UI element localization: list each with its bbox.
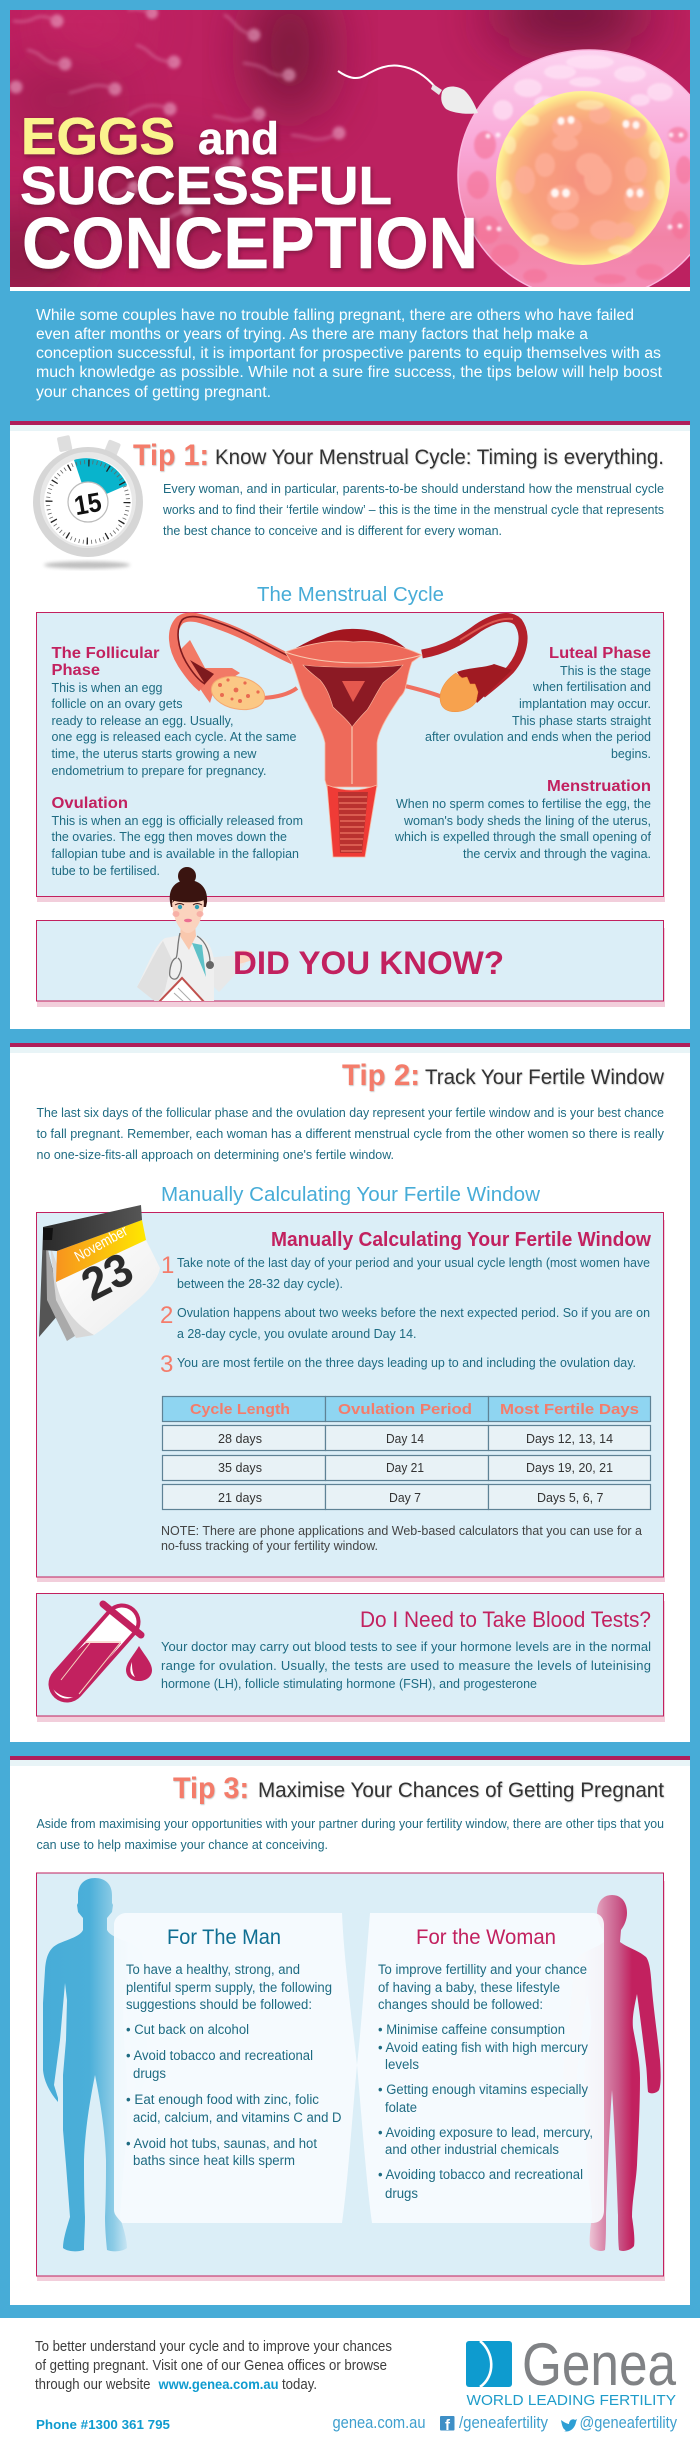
icon: calendar: November — [72, 1223, 131, 1265]
card: for the woman: • Avoiding exposure to lead, mercury, — [378, 2125, 593, 2140]
tip 1 body text: the best chance to conceive and is different for every woman. — [163, 523, 502, 538]
illustration: uterus — [173, 617, 523, 857]
text: the follicular phase: Phase — [52, 662, 100, 679]
vagina — [327, 785, 377, 857]
tip 2 body text: The last six days of the follicular phase and the ovulation day represent your fertile window and is your best chance — [36, 1105, 664, 1120]
panel: tip 2 — [10, 1043, 690, 1742]
card: for the man: acid, calcium, and vitamins C and D — [133, 2110, 342, 2125]
card: for the woman — [357, 1913, 604, 2223]
table — [162, 1396, 650, 1510]
card: for the man: • Eat enough food with zinc, folic — [126, 2092, 319, 2107]
card: for the woman: • Getting enough vitamins especially — [378, 2082, 588, 2097]
card: for the woman: folate — [385, 2100, 417, 2115]
table header: Ovulation Period — [338, 1401, 472, 1418]
card: for the woman: levels — [385, 2057, 419, 2072]
tip 2 body text: no one-size-fits-all approach on determining one's fertile window. — [36, 1147, 394, 1162]
table row 3: Days 5, 6, 7 — [537, 1490, 604, 1505]
card: for the woman: • Minimise caffeine consumption — [378, 2022, 565, 2037]
social links: genea.com.au — [332, 2414, 426, 2432]
step 1: 1 — [161, 1252, 174, 1279]
blood test title: Do I Need to Take Blood Tests? — [360, 1607, 651, 1632]
icon: facebook — [440, 2416, 454, 2434]
step 1 — [161, 1252, 650, 1291]
uterus body — [285, 641, 422, 787]
text: menstruation: the cervix and through the vagina. — [463, 847, 651, 861]
table row 1: 28 days — [218, 1431, 262, 1446]
card: for the man: • Cut back on alcohol — [126, 2022, 249, 2037]
social links: @geneafertility — [580, 2414, 678, 2432]
heading: tip 1 — [133, 439, 664, 472]
title: and — [198, 113, 279, 164]
footer call to action: today. — [282, 2377, 317, 2393]
footer call to action: of getting pregnant. Visit one of our Genea offices or browse — [35, 2358, 387, 2374]
table row 2 — [162, 1456, 650, 1480]
text: the follicular phase: The Follicular — [52, 645, 160, 662]
card: for the woman: To improve fertillity and your chance — [378, 1962, 587, 1977]
card: for the man: • Avoid hot tubs, saunas, and hot — [126, 2136, 317, 2151]
text: luteal phase: begins. — [611, 747, 651, 761]
heading: tip 1: Know Your Menstrual Cycle: Timing is everything. — [215, 446, 664, 469]
icon: calendar: 23 — [73, 1242, 141, 1311]
heading: tip 3: Maximise Your Chances of Getting Pregnant — [258, 1779, 664, 1802]
illustration: doctor — [137, 925, 252, 1003]
card: for the man: baths since heat kills sperm — [133, 2153, 295, 2168]
note — [161, 1523, 643, 1553]
title: EGGS — [21, 108, 175, 166]
right tube — [422, 617, 523, 694]
egg yolk — [496, 91, 670, 265]
left tube — [180, 640, 240, 703]
icon: twitter — [561, 2419, 577, 2431]
social links: /geneafertility — [459, 2414, 549, 2432]
text: luteal phase: This phase starts straight — [512, 714, 652, 728]
card: for the man: suggestions should be followed: — [126, 1997, 312, 2012]
intro paragraph: While some couples have no trouble falling pregnant, there are others who have failed — [36, 307, 634, 324]
card: for the man: • Avoid tobacco and recreational — [126, 2048, 313, 2063]
note: NOTE: There are phone applications and Web-based calculators that you can use for a — [161, 1523, 643, 1538]
text: menstruation: which is expelled through the small opening of — [394, 830, 652, 844]
table header: Cycle Length — [190, 1401, 290, 1418]
silhouette: woman — [563, 1895, 661, 2251]
ligaments — [262, 688, 297, 698]
hero banner — [10, 10, 690, 291]
intro paragraph: your chances of getting pregnant. — [36, 384, 271, 401]
logo: genea — [466, 2331, 677, 2409]
heading: manually calculating: Manually Calculating Your Fertile Window — [161, 1184, 541, 1206]
card: for the woman: • Avoid eating fish with high mercury — [378, 2040, 588, 2055]
tip 1 body text: works and to find their ‘fertile window’ – this is the time in the menstrual cycle that represents — [162, 502, 664, 517]
social links — [332, 2414, 678, 2434]
heading: for the woman: For the Woman — [416, 1926, 556, 1949]
table row 1 — [162, 1426, 650, 1450]
text: menstruation — [394, 778, 652, 861]
phone number: Phone #1300 361 795 — [36, 2417, 170, 2432]
icon: stopwatch — [33, 435, 143, 568]
calculation title: Manually Calculating Your Fertile Window — [271, 1229, 651, 1251]
step 2: Ovulation happens about two weeks before the next expected period. So if you are on — [177, 1305, 650, 1320]
text: the follicular phase: This is when an egg — [52, 681, 163, 695]
blood test text: Your doctor may carry out blood tests to see if your hormone levels are in the normal — [161, 1639, 651, 1654]
card: for the man: To have a healthy, strong, and — [126, 1962, 300, 1977]
table row 1: Day 14 — [386, 1431, 424, 1446]
card: for the woman: changes should be followed: — [378, 1997, 543, 2012]
note: no-fuss tracking of your fertility window. — [161, 1538, 378, 1553]
background sperm (blurred) — [10, 7, 346, 222]
text: the follicular phase: time, the uterus starts growing a new — [52, 747, 257, 761]
step 2 — [160, 1302, 650, 1341]
heading: tip 3 — [173, 1772, 664, 1805]
uterus cavity — [303, 665, 403, 727]
intro paragraph: even after months or years of trying. As there are many factors that help make a — [36, 326, 588, 343]
text: luteal phase: Luteal Phase — [549, 645, 651, 662]
step 1: Take note of the last day of your period and your usual cycle length (most women have — [177, 1255, 650, 1270]
text: menstruation: woman's body sheds the lining of the uterus, — [403, 814, 651, 828]
card: for the man: drugs — [133, 2066, 166, 2081]
icon: stopwatch: 15 — [72, 487, 104, 521]
table header: Most Fertile Days — [500, 1401, 639, 1418]
footer call to action: through our website — [35, 2377, 150, 2393]
intro paragraph: much knowledge as possible. While not a sure fire success, the tips below will help boost — [36, 364, 663, 381]
panel: blood tests — [36, 1594, 665, 1722]
table row 2: Days 19, 20, 21 — [526, 1460, 613, 1475]
blood test text — [161, 1639, 651, 1691]
text: luteal phase: This is the stage — [560, 664, 651, 678]
blood test text: range for ovulation. Usually, the tests are used to measure the levels of luteinising — [161, 1658, 651, 1673]
heading: tip 3: Tip 3: — [173, 1772, 249, 1805]
text: ovulation: tube to be fertilised. — [52, 864, 160, 878]
doctor head — [170, 867, 207, 933]
card: for the woman: • Avoiding tobacco and recreational — [378, 2167, 583, 2182]
step 2: 2 — [160, 1302, 173, 1329]
text: luteal phase: after ovulation and ends when the period — [425, 730, 651, 744]
table row 3 — [162, 1484, 650, 1510]
text: the follicular phase — [52, 645, 297, 778]
step 2: a 28-day cycle, you ovulate around Day 14. — [177, 1326, 416, 1341]
heading: the menstrual cycle: The Menstrual Cycle — [257, 584, 444, 606]
title — [20, 108, 478, 284]
footer call to action: To better understand your cycle and to improve your chances — [35, 2339, 392, 2355]
tip 1 body text: Every woman, and in particular, parents-to-be should understand how the menstrual cycle — [163, 481, 664, 496]
table row 2: 35 days — [218, 1460, 262, 1475]
tip 3 body text — [36, 1816, 664, 1852]
footer — [0, 2318, 700, 2449]
step 3: 3 — [160, 1351, 173, 1378]
icon: facebook: f — [445, 2417, 451, 2434]
panel: tip 1 — [10, 421, 690, 1029]
text: ovulation — [52, 795, 303, 878]
text: menstruation: When no sperm comes to fertilise the egg, the — [396, 797, 651, 811]
logo: genea: WORLD LEADING FERTILITY — [466, 2392, 676, 2409]
text: luteal phase: when fertilisation and — [532, 680, 651, 694]
heading: tip 2: Track Your Fertile Window — [425, 1066, 665, 1089]
heading: tip 1: Tip 1: — [133, 439, 209, 472]
text: ovulation: the ovaries. The egg then moves down the — [52, 830, 287, 844]
blood test text: hormone (LH), follicle stimulating hormone (FSH), and progesterone — [161, 1676, 537, 1691]
text: ovulation: This is when an egg is officially released from — [52, 814, 303, 828]
text: the follicular phase: follicle on an ovary gets — [52, 697, 182, 711]
step 3 — [160, 1351, 636, 1378]
text: luteal phase: implantation may occur. — [519, 697, 651, 711]
panel: did you know — [36, 867, 665, 1007]
did you know text: DID YOU KNOW? — [233, 945, 504, 981]
title: SUCCESSFUL — [20, 156, 392, 216]
panel: man and woman — [36, 1873, 665, 2281]
card: for the woman: and other industrial chemicals — [385, 2142, 559, 2157]
neck — [180, 928, 196, 950]
footer call to action — [35, 2339, 392, 2393]
table row 2: Day 21 — [386, 1460, 424, 1475]
left ovary — [208, 672, 268, 714]
text: luteal phase — [425, 645, 652, 761]
text: the follicular phase: endometrium to prepare for pregnancy. — [52, 764, 266, 778]
text: ovulation: Ovulation — [52, 795, 128, 812]
card: for the man: plentiful sperm supply, the following — [126, 1980, 332, 1995]
arm and coat — [214, 956, 246, 992]
tip 2 body text — [36, 1105, 664, 1162]
text: ovulation: fallopian tube and is available in the fallopian — [52, 847, 299, 861]
footer call to action: www.genea.com.au — [158, 2376, 278, 2392]
clipboard — [158, 978, 205, 1003]
tip 3 body text: can use to help maximise your chance at conceiving. — [36, 1837, 328, 1852]
egg outer membrane — [458, 50, 700, 300]
icon: test tube and drop — [50, 1604, 152, 1697]
text: the follicular phase: ready to release an egg. Usually, — [52, 714, 233, 728]
tip 2 body text: to fall pregnant. Remember, each woman has a different menstrual cycle from the other women so there is really — [36, 1126, 664, 1141]
right ovary — [440, 673, 478, 712]
panel: menstrual cycle — [36, 612, 665, 902]
stethoscope — [170, 933, 210, 979]
silhouette: man — [43, 1878, 147, 2251]
logo: genea: Genea — [522, 2331, 677, 2398]
table row 1: Days 12, 13, 14 — [526, 1431, 613, 1446]
table row 3: 21 days — [218, 1490, 262, 1505]
heading: for the man: For The Man — [167, 1926, 281, 1949]
text: menstruation: Menstruation — [547, 778, 651, 795]
text: the follicular phase: one egg is released each cycle. At the same — [52, 730, 297, 744]
table header — [162, 1396, 650, 1422]
table row 3: Day 7 — [389, 1490, 421, 1505]
uterus dome — [296, 629, 410, 652]
panel: tip 3 — [10, 1756, 690, 2305]
card: for the woman: drugs — [385, 2186, 418, 2201]
intro paragraph: conception successful, it is important for prospective parents to equip themselves with as — [36, 345, 661, 362]
panel: manual calculation — [36, 1205, 665, 1582]
heading: tip 2: Tip 2: — [342, 1059, 420, 1092]
card: for the woman: of having a baby, these lifestyle — [378, 1980, 560, 1995]
step 3: You are most fertile on the three days leading up to and including the ovulation day. — [177, 1355, 636, 1370]
step 1: between the 28-32 day cycle). — [177, 1276, 343, 1291]
intro paragraph — [36, 307, 663, 401]
icon: calendar — [39, 1205, 160, 1341]
card: for the man — [114, 1913, 357, 2223]
heading: tip 2 — [342, 1059, 665, 1092]
tip 1 body text — [162, 481, 664, 538]
tip 3 body text: Aside from maximising your opportunities with your partner during your fertility window, there are other tips that you — [36, 1816, 664, 1831]
sperm — [338, 65, 478, 114]
title: CONCEPTION — [22, 204, 478, 284]
